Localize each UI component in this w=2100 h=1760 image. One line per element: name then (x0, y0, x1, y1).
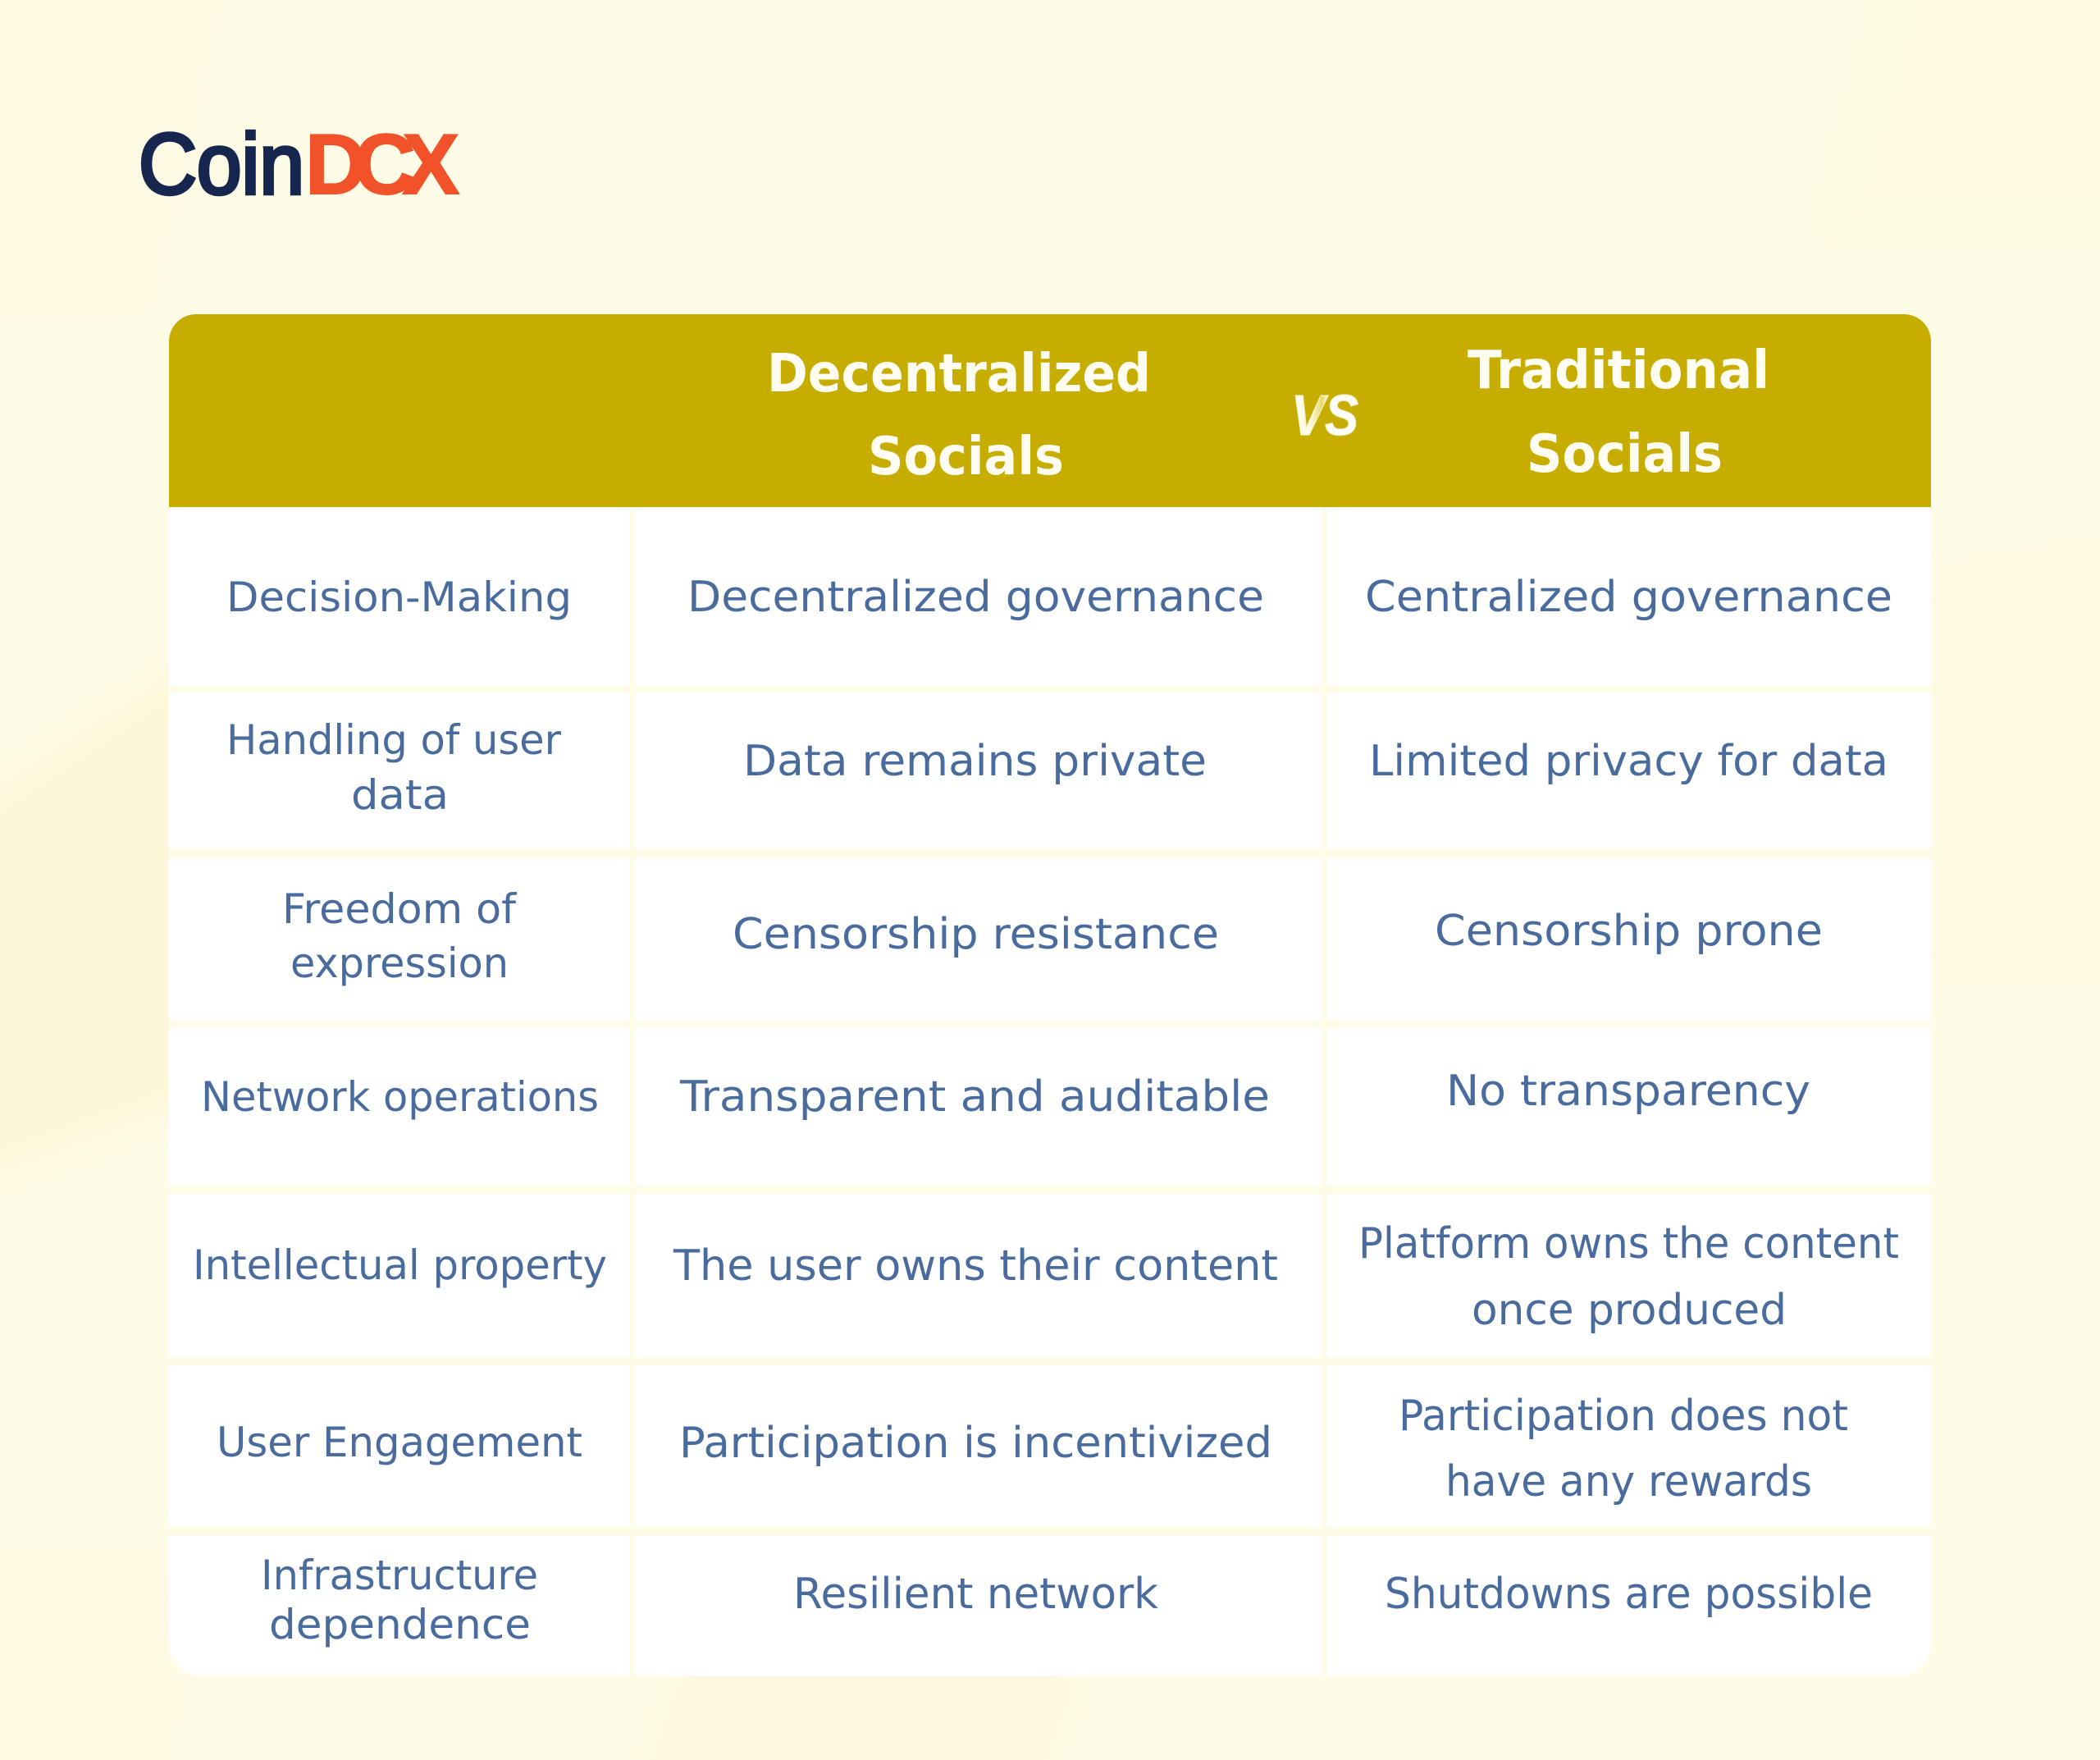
row: Network operations: Network operations (201, 1073, 599, 1121)
logo: CoinDCX (139, 117, 459, 213)
row: User Engagement: have any rewards (1445, 1457, 1812, 1506)
logo: CoinDCX: DCX (305, 117, 459, 213)
heading: Decentralized Socials (767, 344, 1151, 487)
row: Handling of user data: Limited privacy for data (1369, 737, 1888, 786)
heading: Traditional Socials: Traditional (1468, 341, 1769, 401)
row: Network operations: Transparent and auditable (679, 1072, 1270, 1122)
heading: Decentralized Socials: Decentralized (767, 344, 1151, 405)
logo: CoinDCX: Coin (139, 117, 304, 213)
row: Intellectual property: Platform owns the content (1358, 1219, 1899, 1269)
row: Infrastructure dependence: Shutdowns are possible (1385, 1570, 1873, 1619)
row: User Engagement (169, 1365, 1931, 1527)
row: Infrastructure dependence: Infrastructure (261, 1552, 538, 1599)
row: Intellectual property: once produced (1472, 1286, 1787, 1335)
row: Intellectual property: The user owns their content (673, 1241, 1278, 1291)
table gutters (169, 507, 1931, 1676)
row: Freedom of expression: Censorship resistance (733, 910, 1219, 959)
row: Freedom of expression (169, 857, 1931, 1021)
row: User Engagement: Participation is incentivized (679, 1419, 1272, 1468)
row: Freedom of expression: Censorship prone (1435, 907, 1823, 956)
row: Freedom of expression: Freedom of (282, 885, 517, 933)
icon: VS badge: VS (1291, 383, 1358, 447)
row: Network operations: No transparency (1446, 1067, 1810, 1116)
row: Handling of user data (169, 693, 1931, 849)
row: Decision-Making: Decentralized governance (687, 573, 1264, 622)
heading: Decentralized Socials: Socials (868, 427, 1064, 487)
row: Infrastructure dependence (169, 1536, 1931, 1676)
heading: Traditional Socials (1468, 341, 1769, 485)
table header band (169, 314, 1931, 507)
row: Handling of user data: Data remains private (743, 737, 1207, 786)
row: Decision-Making: Centralized governance (1365, 573, 1892, 622)
row: Network operations (169, 1027, 1931, 1186)
row: Infrastructure dependence: dependence (269, 1601, 531, 1648)
row: User Engagement: User Engagement (217, 1419, 582, 1466)
heading: Traditional Socials: Socials (1527, 424, 1723, 485)
row: Freedom of expression: expression (290, 939, 509, 987)
row: User Engagement: Participation does not (1399, 1392, 1848, 1441)
row: Infrastructure dependence: Resilient network (793, 1570, 1158, 1619)
row: Handling of user data: Handling of user (226, 716, 561, 764)
row: Intellectual property: Intellectual property (193, 1241, 607, 1289)
row: Intellectual property (169, 1194, 1931, 1357)
row: Handling of user data: data (351, 771, 449, 819)
row: Decision-Making: Decision-Making (226, 574, 572, 621)
row: Decision-Making (169, 508, 1931, 686)
